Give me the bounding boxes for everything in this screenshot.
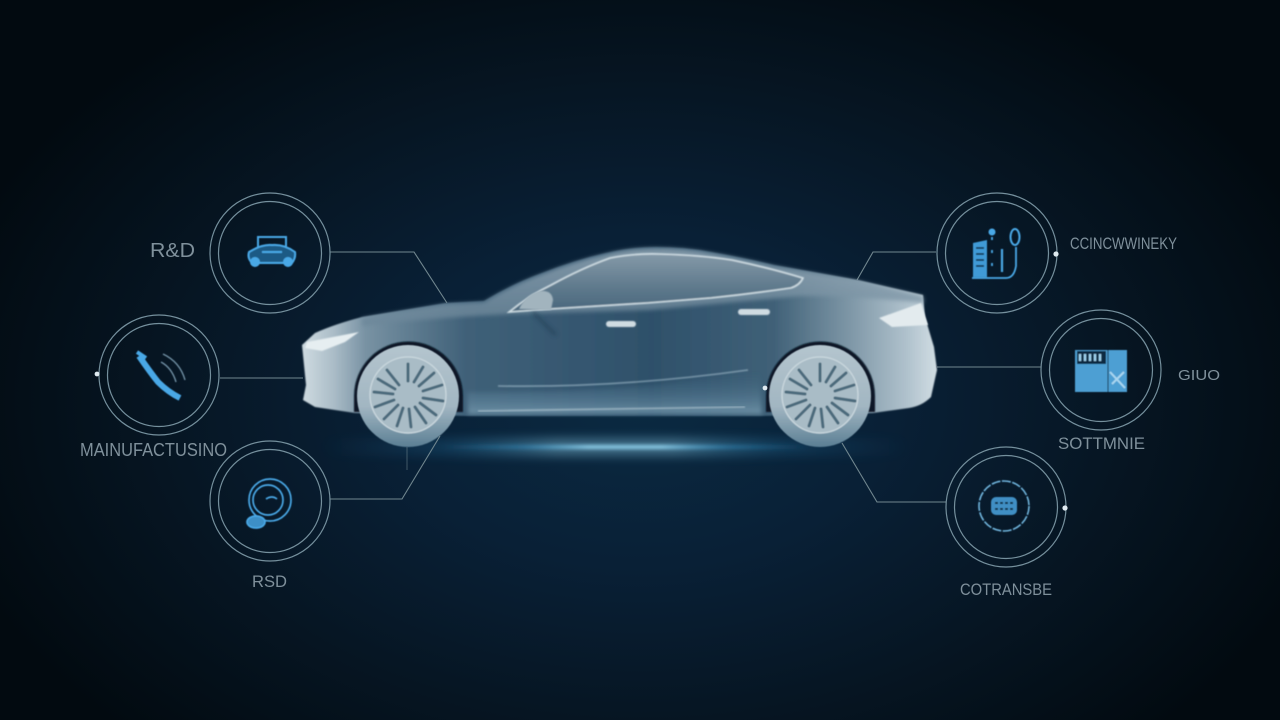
rear door handle (738, 309, 770, 315)
icon: building and cable (972, 228, 1020, 278)
floor light glow (320, 438, 910, 456)
label: software: SOTTMNIE (1058, 434, 1145, 453)
door shadow (533, 312, 556, 335)
node: bottom right (946, 447, 1068, 599)
node: software (1041, 310, 1220, 453)
side window (509, 254, 803, 312)
rear wheel (769, 345, 871, 447)
headlight (305, 332, 359, 351)
car (302, 247, 937, 447)
connector lines (220, 252, 1041, 502)
front wheel (357, 345, 459, 447)
node: RSD bottom left (210, 441, 330, 591)
tail light (879, 303, 928, 327)
upper body highlight (362, 248, 924, 326)
icon: ring gauge (247, 479, 291, 528)
node: R&D top left (150, 193, 330, 313)
label: RSD: RSD (252, 572, 287, 591)
rear wheel marker (763, 386, 767, 390)
side mirror (519, 291, 553, 310)
label: right side: GIUO (1178, 367, 1220, 384)
sill highlight (478, 407, 745, 411)
label: company: CCINCWWINEKY (1070, 234, 1177, 253)
front door handle (606, 321, 636, 327)
icon: document panel (1075, 350, 1127, 392)
node: company top right (937, 193, 1177, 313)
icon: robotic arm (137, 352, 185, 398)
label: bottom right: COTRANSBE (960, 580, 1052, 599)
node dot (1053, 251, 1059, 257)
body crease line (498, 370, 748, 386)
wheel arches (354, 341, 875, 412)
icon: badge (979, 481, 1029, 531)
car body (302, 247, 937, 416)
lower body reflection (467, 372, 762, 414)
icon: vehicle (248, 237, 295, 266)
label: R&D: R&D (150, 240, 195, 262)
node dot (1062, 505, 1068, 511)
node dot (95, 372, 99, 376)
node: manufacturing (80, 315, 227, 460)
label: manufacturing: MAINUFACTUSINO (80, 440, 227, 460)
